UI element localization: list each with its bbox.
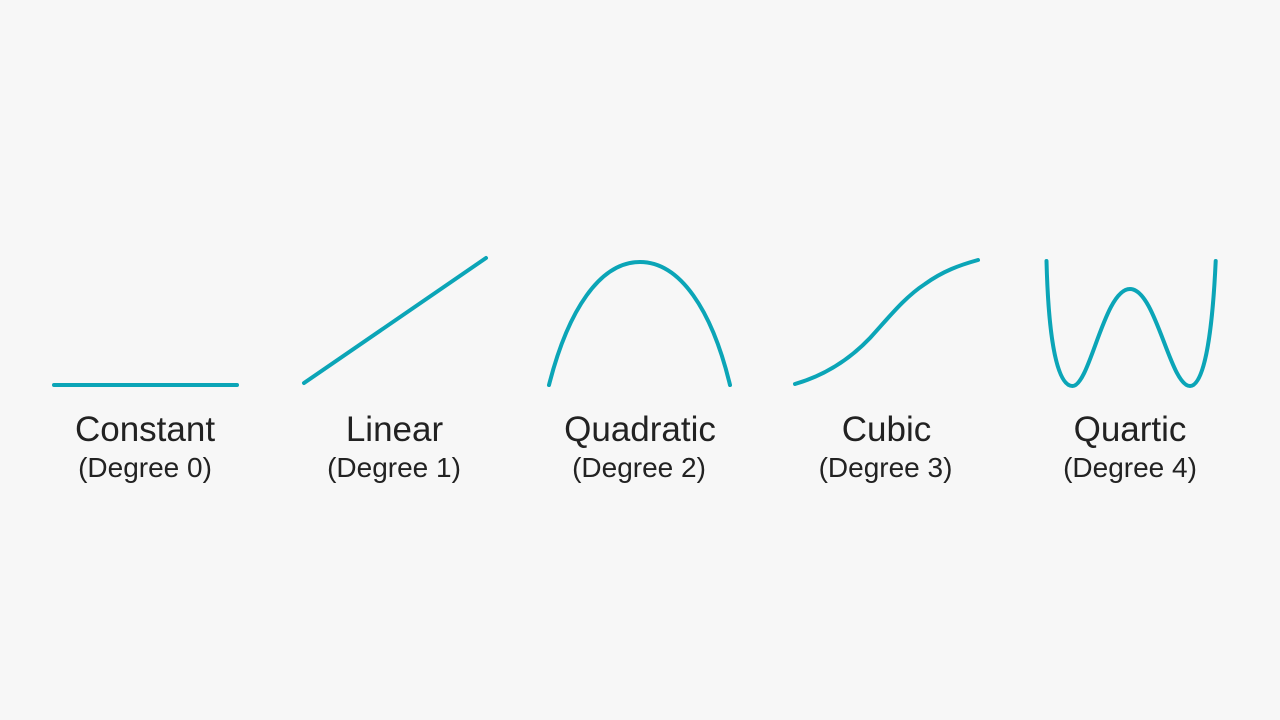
degree: quartic: (Degree 4) bbox=[1063, 452, 1197, 483]
degree: linear: (Degree 1) bbox=[327, 452, 461, 483]
label: cubic: Cubic bbox=[842, 410, 931, 449]
panel: quadratic bbox=[549, 262, 730, 483]
panel: cubic bbox=[795, 260, 978, 483]
degree: cubic: (Degree 3) bbox=[819, 452, 952, 483]
label: quadratic: Quadratic bbox=[564, 410, 716, 449]
label: quartic: Quartic bbox=[1074, 410, 1186, 449]
curve: linear bbox=[304, 258, 486, 383]
curve: cubic bbox=[795, 260, 978, 384]
panel: quartic bbox=[1046, 261, 1216, 483]
degree: constant: (Degree 0) bbox=[78, 452, 212, 483]
degree: quadratic: (Degree 2) bbox=[572, 452, 706, 483]
curve: quartic bbox=[1046, 261, 1216, 386]
label: linear: Linear bbox=[346, 410, 443, 449]
curve: constant bbox=[54, 383, 237, 387]
label: constant: Constant bbox=[75, 410, 215, 449]
panel: linear bbox=[304, 258, 486, 483]
panel: constant bbox=[54, 385, 237, 483]
curve: quadratic bbox=[549, 262, 730, 385]
